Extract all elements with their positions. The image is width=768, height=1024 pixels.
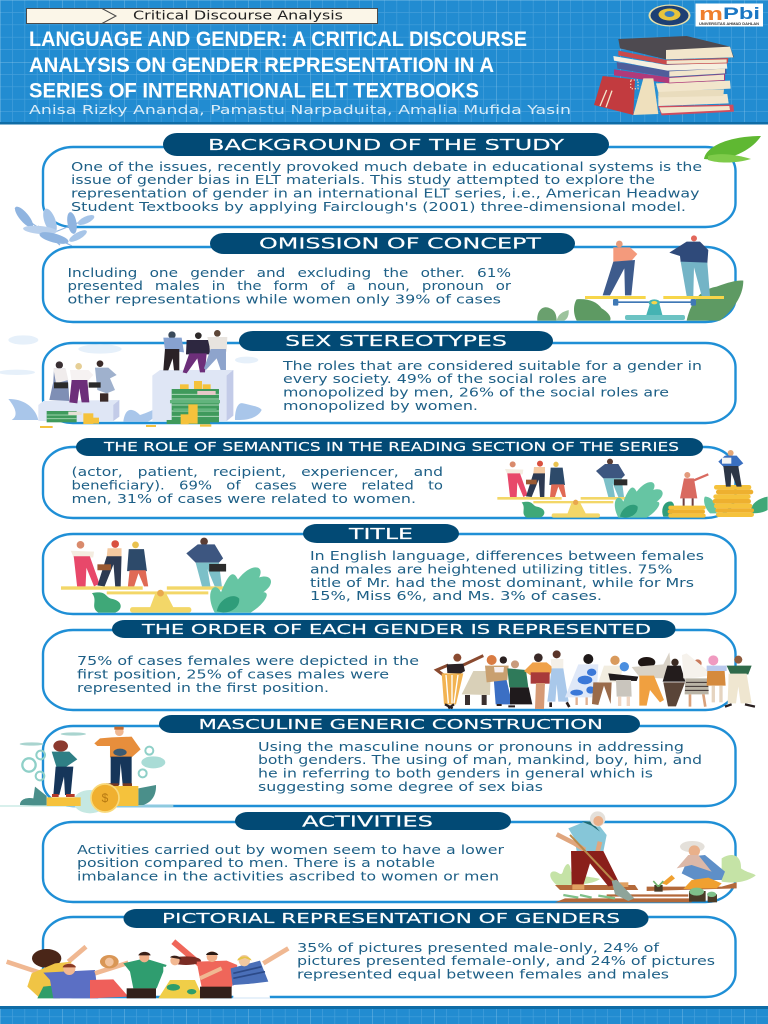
logo: mPBI — [696, 4, 763, 26]
heading: pictorial — [124, 909, 648, 928]
text: pictorial: pictures presented female-only, and 24% of pictures — [297, 953, 715, 968]
illustration: people on balance — [61, 538, 271, 613]
heading: order — [112, 620, 676, 638]
text: pictorial: 35% of pictures presented male-only, 24% of — [297, 940, 660, 955]
panel: role of semantics — [43, 438, 736, 518]
text: stereotypes: The roles that are considered suitable for a gender in — [282, 358, 702, 373]
heading: omission: OMISSION OF CONCEPT — [259, 234, 542, 252]
title: SERIES OF INTERNATIONAL ELT TEXTBOOKS — [29, 80, 479, 102]
heading: stereotypes — [239, 331, 553, 351]
illustration: crowd of women — [437, 650, 755, 709]
text: order: first position, 25% of cases males were — [77, 666, 389, 682]
text: semantics: (actor, patient, recipient, experiencer, and — [72, 464, 443, 479]
text: activities — [77, 842, 505, 884]
text: background: One of the issues, recently provoked much debate in educational systems is the — [71, 159, 702, 174]
illustration: woman and man on balance — [537, 235, 743, 321]
footer band — [0, 1006, 768, 1024]
heading: semantics: THE ROLE OF SEMANTICS IN THE READING SECTION OF THE SERIES — [103, 440, 679, 454]
illustration: man and woman on coins: $ — [102, 791, 109, 805]
heading: masculine — [159, 715, 640, 733]
text: masculine — [258, 739, 702, 794]
text: omission: Including one gender and excluding the other. 61% — [68, 265, 511, 280]
heading: masculine: MASCULINE GENERIC CONSTRUCTION — [198, 717, 603, 733]
text: activities: Activities carried out by women seem to have a lower — [77, 842, 505, 857]
text: stereotypes: monopolized by women. — [283, 398, 478, 413]
panel: title — [43, 524, 736, 614]
panel: background of the study — [43, 133, 736, 227]
text: omission: presented males in the form of a noun, pronoun or — [68, 278, 512, 293]
text: activities: position compared to men. There is a notable — [77, 855, 435, 870]
tag: Critical Discourse Analysis: Critical Discourse Analysis — [133, 8, 343, 22]
heading: semantics — [76, 438, 703, 456]
logo: mPBI: UNIVERSITAS AHMAD DAHLAN — [699, 22, 760, 26]
text: title: and males are heightened utilizing titles. 75% — [310, 562, 673, 576]
panel: sex stereotypes — [43, 331, 736, 423]
tag: Critical Discourse Analysis — [26, 8, 378, 24]
text: order — [77, 653, 419, 695]
panel: masculine generic construction — [43, 715, 736, 806]
heading: pictorial: PICTORIAL REPRESENTATION OF GENDERS — [162, 911, 620, 927]
text: background — [71, 159, 702, 214]
illustration: balance with people and coins — [497, 450, 768, 518]
text: semantics: men, 31% of cases were related to women. — [72, 491, 416, 506]
icon: university seal — [648, 4, 690, 26]
panel: omission of concept — [43, 233, 736, 322]
heading: omission — [210, 233, 575, 254]
panel: activities — [43, 812, 736, 902]
title: ANALYSIS ON GENDER REPRESENTATION IN A — [29, 54, 494, 77]
heading: title — [303, 524, 459, 543]
text: title — [310, 548, 704, 603]
heading: activities — [235, 812, 511, 830]
text: background: issue of gender bias in ELT materials. This study attempted to explore the — [71, 172, 655, 187]
icon: book stack — [594, 36, 734, 115]
text: title: title of Mr. had the most dominant, while for Mrs — [310, 575, 694, 590]
icon: green leaf — [704, 136, 761, 163]
panel: order of each gender — [43, 620, 736, 710]
text: order: represented in the first position. — [77, 680, 329, 695]
text: masculine: Using the masculine nouns or pronouns in addressing — [258, 739, 684, 754]
title — [29, 28, 527, 102]
title: LANGUAGE AND GENDER: A CRITICAL DISCOURSE — [29, 28, 527, 51]
logo: mPBI: m — [699, 4, 723, 24]
illustration: elderly couple gardening — [550, 811, 756, 902]
text: background: representation of gender in an international ELT series, i.e., American Headway — [71, 186, 700, 200]
header band — [0, 0, 768, 124]
text: omission — [68, 265, 512, 306]
text: stereotypes: every society. 49% of the social roles are — [283, 371, 607, 386]
heading: background — [163, 133, 609, 156]
text: omission: other representations while women only 39% of cases — [68, 292, 501, 306]
text: order: 75% of cases females were depicted in the — [77, 653, 419, 668]
heading: stereotypes: SEX STEREOTYPES — [285, 332, 507, 350]
text: semantics: beneficiary). 69% of cases were related to — [72, 478, 443, 492]
logo: mPBI: Pbi — [723, 4, 760, 23]
panel: pictorial representation — [43, 909, 736, 997]
text: stereotypes — [282, 358, 702, 413]
text: masculine: suggesting some degree of sex bias — [258, 779, 543, 794]
text: stereotypes: monopolized by men, 26% of the social roles are — [283, 384, 669, 400]
text: masculine: both genders. The using of man, mankind, boy, him, and — [258, 752, 702, 767]
text: background: Student Textbooks by applying Fairclough's (2001) three-dimensional model. — [71, 199, 686, 214]
text: masculine: he in referring to both genders in general which is — [258, 766, 653, 780]
text: title: In English language, differences between females — [310, 548, 704, 563]
text: pictorial: represented equal between females and males — [297, 966, 669, 982]
heading: order: THE ORDER OF EACH GENDER IS REPRESENTED — [140, 622, 651, 638]
heading: background: BACKGROUND OF THE STUDY — [208, 136, 565, 154]
illustration: cheering group — [7, 942, 288, 998]
heading: activities: ACTIVITIES — [302, 812, 433, 830]
authors: Anisa Rizky Ananda, Pamastu Narpaduita, Amalia Mufida Yasin — [29, 102, 571, 117]
text: title: 15%, Miss 6%, and Ms. 3% of cases. — [310, 588, 602, 603]
text: activities: imbalance in the activities ascribed to women or men — [77, 868, 499, 884]
text: semantics — [72, 464, 443, 506]
text: pictorial — [297, 940, 715, 982]
illustration: man and woman on coins — [0, 727, 173, 813]
illustration: people on podiums with money — [0, 330, 262, 428]
icon: blue branch — [12, 204, 96, 246]
heading: title: TITLE — [347, 525, 413, 543]
